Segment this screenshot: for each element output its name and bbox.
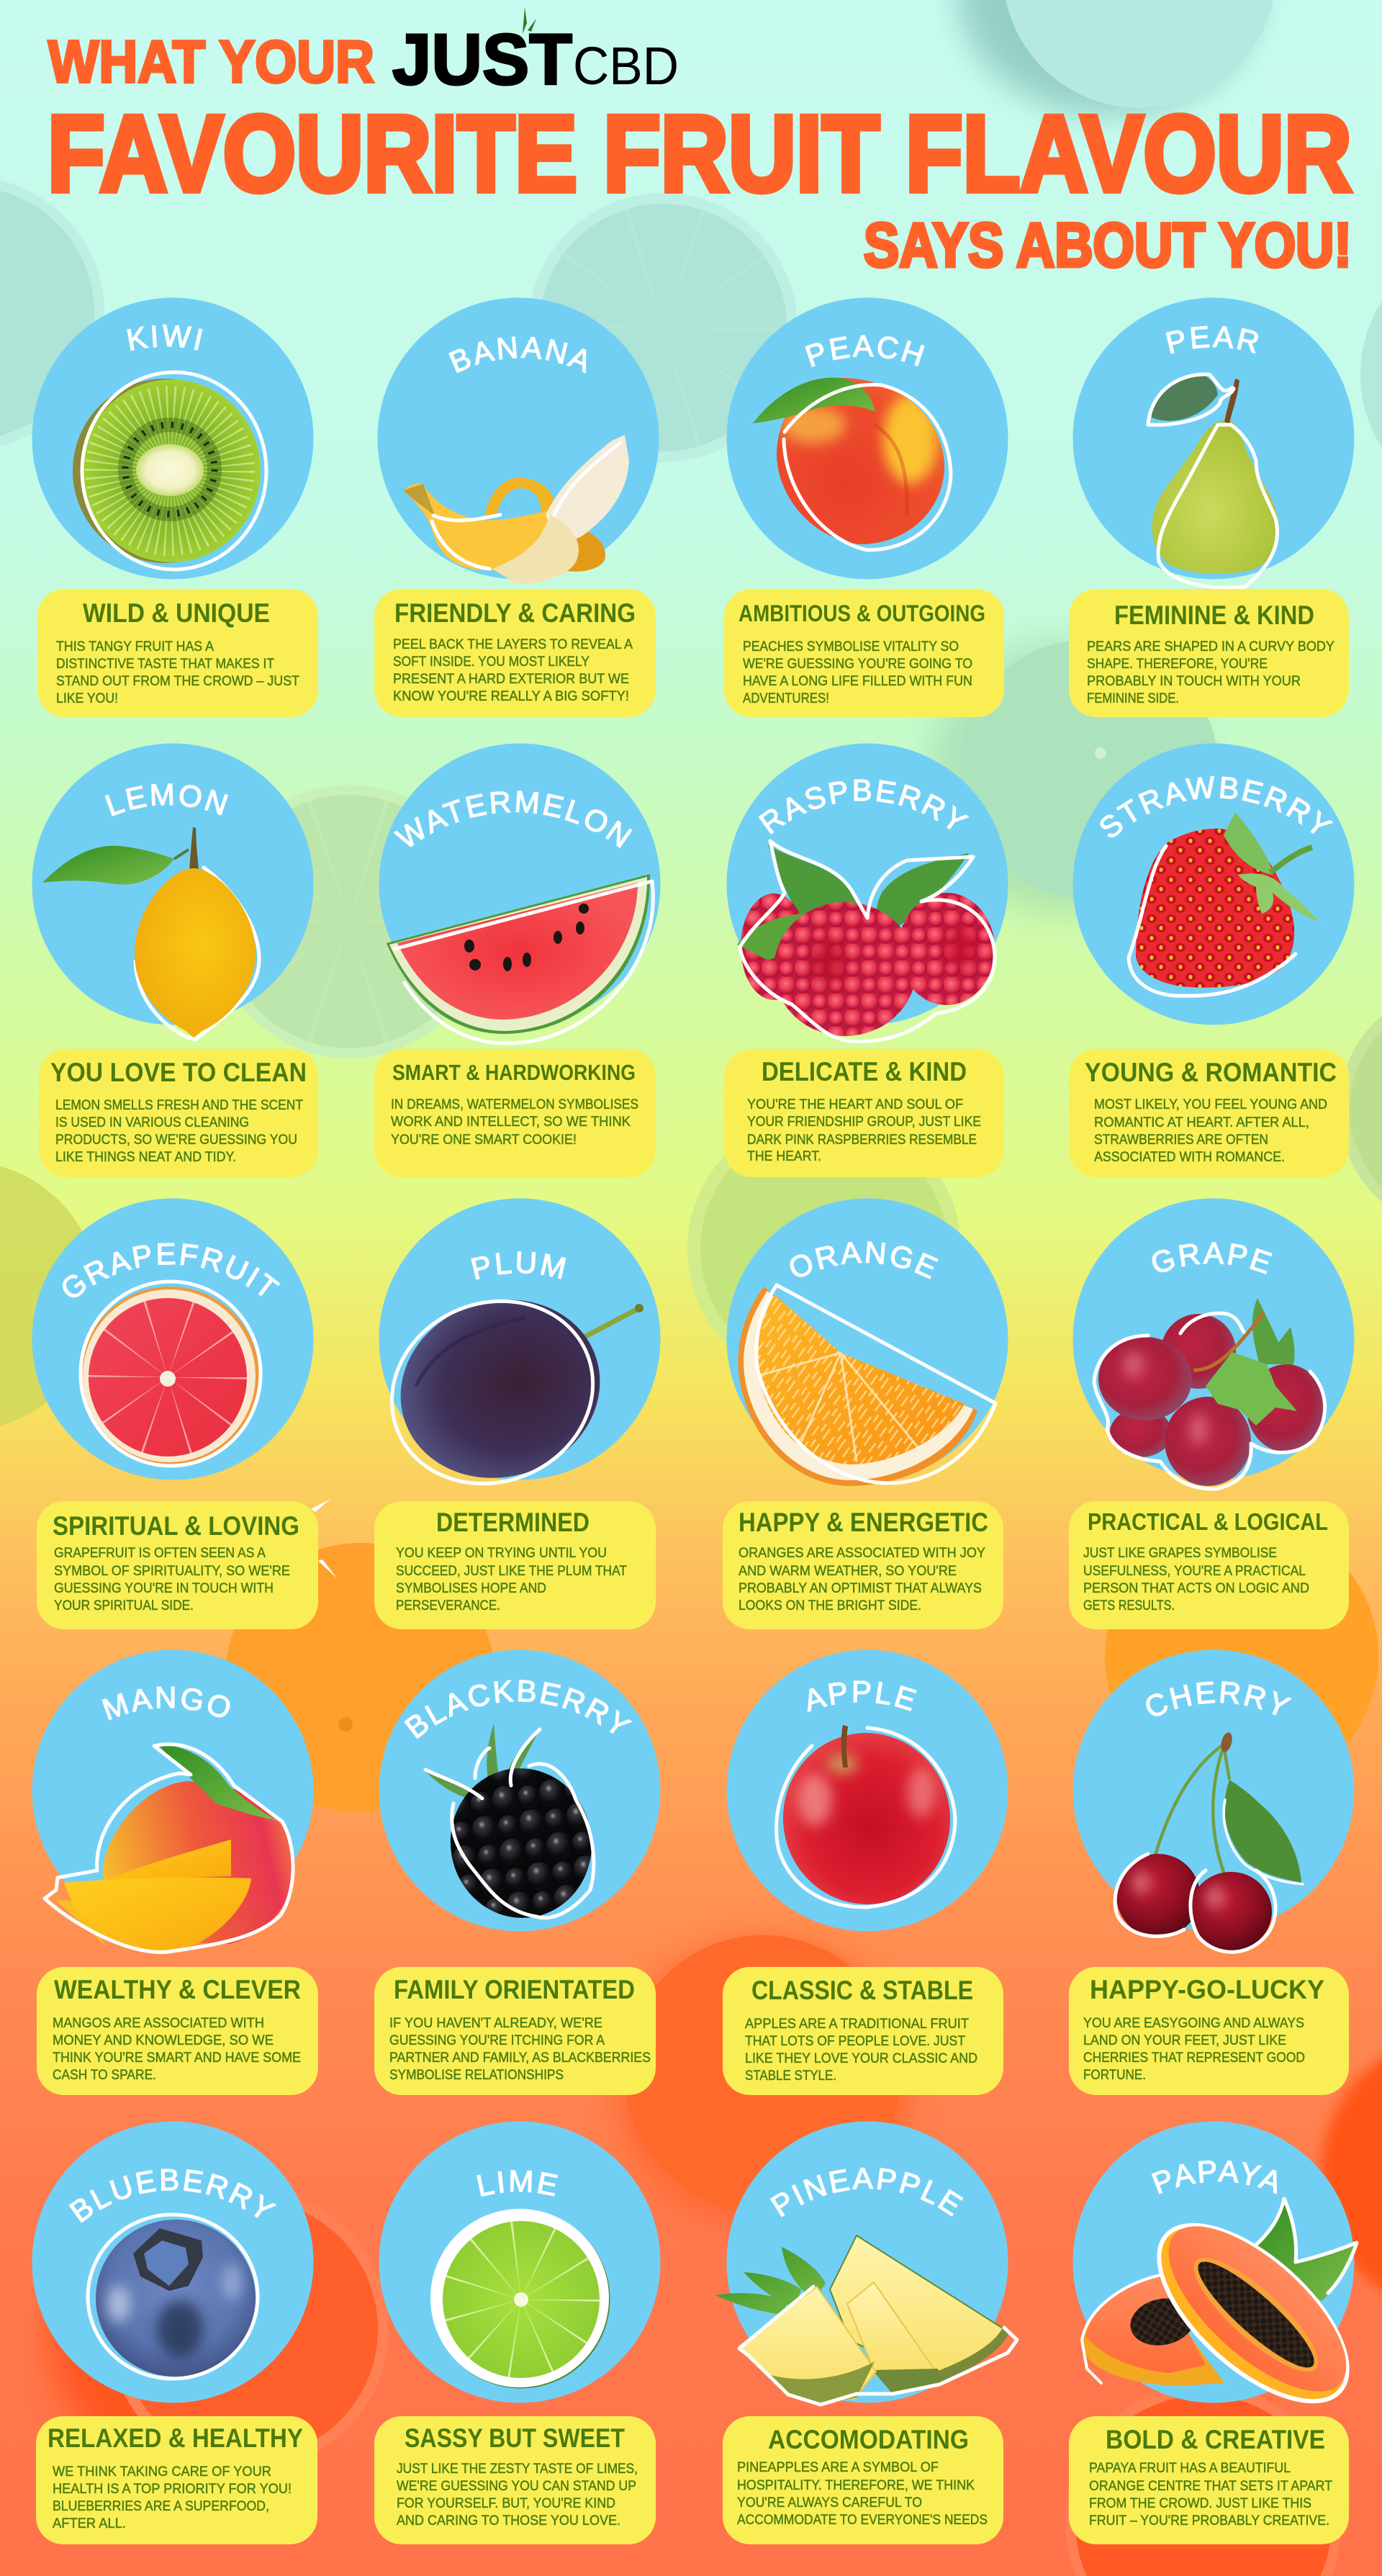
body text: PAPAYA FRUIT HAS A BEAUTIFUL — [1089, 2460, 1291, 2476]
body text: FOR YOURSELF. BUT, YOU'RE KIND — [397, 2495, 615, 2511]
body text: SUCCEED, JUST LIKE THE PLUM THAT — [396, 1563, 627, 1579]
blue circle — [377, 298, 659, 579]
faded lime left row three — [0, 1161, 99, 1431]
body text: FORTUNE. — [1083, 2067, 1146, 2083]
body text: LEMON SMELLS FRESH AND THE SCENT — [55, 1097, 303, 1113]
heading: RELAXED & HEALTHY — [48, 2423, 303, 2453]
curved label: GRAPE — [1152, 1242, 1273, 1274]
body text: AFTER ALL. — [53, 2516, 126, 2531]
curved label: PLUM — [471, 1251, 566, 1280]
heading: DETERMINED — [436, 1508, 590, 1537]
body text: IN DREAMS, WATERMELON SYMBOLISES — [391, 1096, 638, 1112]
card — [374, 1049, 656, 1177]
panel: watermelon — [374, 743, 661, 1177]
heading: HAPPY-GO-LUCKY — [1090, 1975, 1324, 2004]
body text: YOUR FRIENDSHIP GROUP, JUST LIKE — [747, 1114, 981, 1130]
blue circle — [379, 743, 661, 1025]
blue circle — [727, 1650, 1008, 1931]
body text — [53, 2015, 301, 2083]
card — [374, 589, 656, 717]
icon: apple — [772, 1722, 961, 1915]
body text: LAND ON YOUR FEET, JUST LIKE — [1083, 2032, 1286, 2048]
card — [723, 1967, 1003, 2095]
card — [1069, 1049, 1349, 1177]
blue circle — [1072, 1198, 1355, 1480]
body text: SYMBOLISE RELATIONSHIPS — [389, 2067, 564, 2083]
body text: PRESENT A HARD EXTERIOR BUT WE — [393, 671, 629, 687]
panel: grape — [1068, 1198, 1356, 1629]
heading: ACCOMODATING — [768, 2425, 969, 2454]
decorative spikes and card — [37, 1499, 337, 1629]
heading: AMBITIOUS & OUTGOING — [739, 600, 985, 626]
body text: FRUIT – YOU'RE PROBABLY CREATIVE. — [1089, 2513, 1329, 2528]
blue circle — [727, 743, 1008, 1025]
faded orange slice bottom left — [50, 2189, 389, 2469]
panel: lime — [374, 2121, 662, 2544]
body text: JUST LIKE THE ZESTY TASTE OF LIMES, — [397, 2461, 638, 2477]
panel: cherry — [1069, 1650, 1362, 2095]
curved label: LEMON — [105, 783, 229, 816]
body text: PROBABLY AN OPTIMIST THAT ALWAYS — [739, 1580, 982, 1596]
card — [37, 589, 318, 717]
panel: orange — [720, 1198, 1008, 1629]
curved label: PINEAPPLE — [770, 2167, 963, 2217]
body text: THIS TANGY FRUIT HAS A — [56, 639, 214, 654]
faded orange slice bottom right — [1065, 2385, 1342, 2576]
body text: MANGOS ARE ASSOCIATED WITH — [53, 2015, 264, 2031]
body text: MONEY AND KNOWLEDGE, SO WE — [53, 2032, 274, 2048]
body text — [396, 1545, 627, 1613]
body text — [53, 2464, 292, 2531]
heading: SASSY BUT SWEET — [405, 2423, 625, 2453]
body text: ASSOCIATED WITH ROMANCE. — [1094, 1149, 1285, 1165]
body text — [743, 639, 972, 706]
panel: kiwi — [32, 298, 318, 717]
card — [723, 1501, 1003, 1629]
body text — [747, 1096, 981, 1164]
curved label: BLACKBERRY — [404, 1680, 633, 1739]
body text — [1083, 2015, 1305, 2083]
icon: cherries — [1115, 1731, 1303, 1952]
card — [374, 1501, 656, 1629]
curved label: APPLE — [808, 1680, 917, 1712]
body text: GRAPEFRUIT IS OFTEN SEEN AS A — [54, 1545, 266, 1561]
blue circle — [1072, 2121, 1355, 2403]
card — [723, 2416, 1003, 2544]
icon: strawberry — [1129, 812, 1319, 996]
heading: FEMININE & KIND — [1114, 600, 1314, 630]
body text: PARTNER AND FAMILY, AS BLACKBERRIES — [389, 2050, 651, 2066]
card — [39, 1049, 318, 1177]
card — [1069, 1967, 1349, 2095]
heading: DELICATE & KIND — [762, 1057, 967, 1086]
body text: APPLES ARE A TRADITIONAL FRUIT — [745, 2016, 969, 2032]
curved label: KIWI — [127, 324, 203, 351]
body text: HAVE A LONG LIFE FILLED WITH FUN — [743, 673, 972, 689]
heading: FAMILY ORIENTATED — [394, 1975, 635, 2004]
body text: YOUR SPIRITUAL SIDE. — [54, 1598, 194, 1613]
body text — [1087, 639, 1334, 706]
curved label: PAPAYA — [1152, 2160, 1277, 2194]
logo: JustCBD — [392, 7, 679, 100]
body text: USEFULNESS, YOU'RE A PRACTICAL — [1083, 1563, 1306, 1579]
blue circle — [32, 2121, 314, 2403]
body text: PEEL BACK THE LAYERS TO REVEAL A — [393, 636, 633, 652]
logo: JustCBD: CBD — [573, 36, 679, 96]
heading: CLASSIC & STABLE — [751, 1976, 973, 2005]
body text — [393, 636, 633, 704]
blue circle — [1072, 298, 1355, 579]
icon: papaya — [1081, 2194, 1376, 2432]
panel: grapefruit — [22, 1198, 337, 1629]
body text — [389, 2015, 651, 2083]
body text: PROBABLY IN TOUCH WITH YOUR — [1087, 673, 1301, 689]
body text: IF YOU HAVEN'T ALREADY, WE'RE — [389, 2015, 602, 2031]
body text: SOFT INSIDE. YOU MOST LIKELY — [393, 654, 590, 670]
heading: WILD & UNIQUE — [83, 598, 270, 628]
curved label: WATERMELON — [393, 791, 632, 848]
body text — [1089, 2460, 1332, 2528]
panel: blueberry — [29, 2121, 317, 2544]
body text: PRODUCTS, SO WE'RE GUESSING YOU — [55, 1132, 297, 1148]
icon: pear — [1148, 374, 1279, 587]
body text: DISTINCTIVE TASTE THAT MAKES IT — [56, 656, 274, 672]
faded lime slice centre right row three — [687, 1112, 961, 1386]
body text: DARK PINK RASPBERRIES RESEMBLE — [747, 1132, 977, 1148]
body text: BLUEBERRIES ARE A SUPERFOOD, — [53, 2498, 269, 2514]
body text: ORANGE CENTRE THAT SETS IT APART — [1089, 2478, 1332, 2494]
heading: BOLD & CREATIVE — [1106, 2425, 1325, 2454]
icon: orange wedge — [738, 1285, 995, 1486]
body text: GUESSING YOU'RE ITCHING FOR A — [389, 2032, 605, 2048]
body text — [745, 2016, 977, 2084]
body text: PERSEVERANCE. — [396, 1598, 500, 1613]
body text — [56, 639, 299, 706]
icon: pineapple slices — [715, 2235, 1017, 2405]
curved label: MANGO — [101, 1686, 230, 1721]
icon: lime slice — [430, 2209, 610, 2389]
body text: ORANGES ARE ASSOCIATED WITH JOY — [739, 1545, 985, 1561]
body text: YOU ARE EASYGOING AND ALWAYS — [1083, 2015, 1304, 2031]
body text: FEMININE SIDE. — [1087, 690, 1179, 706]
body text: JUST LIKE GRAPES SYMBOLISE — [1083, 1545, 1277, 1561]
body text: SHAPE. THEREFORE, YOU'RE — [1087, 656, 1268, 672]
icon: blackberry — [425, 1724, 602, 1927]
body text: ROMANTIC AT HEART. AFTER ALL, — [1094, 1114, 1309, 1130]
body text: LIKE THEY LOVE YOUR CLASSIC AND — [745, 2050, 977, 2066]
faded fruit top right — [957, 0, 1276, 115]
body text: CASH TO SPARE. — [53, 2067, 156, 2083]
icon: blueberry — [88, 2215, 258, 2379]
panel: plum — [364, 1198, 664, 1629]
faded lime right edge — [1360, 238, 1382, 511]
title — [48, 7, 1352, 280]
icon: lemon — [42, 827, 259, 1040]
curved label: ORANGE — [790, 1241, 939, 1279]
icon: kiwi slice — [73, 372, 266, 569]
card — [37, 1967, 318, 2095]
card — [724, 589, 1004, 717]
panel: banana — [374, 298, 659, 717]
panel: pineapple — [715, 2121, 1017, 2544]
body text: THE HEART. — [747, 1148, 821, 1164]
faded lime slice row two — [212, 785, 486, 1058]
body text — [739, 1545, 985, 1613]
body text — [737, 2459, 988, 2528]
heading: YOUNG & ROMANTIC — [1085, 1058, 1337, 1087]
heading: WEALTHY & CLEVER — [54, 1975, 301, 2004]
faded lime right edge row three — [1339, 986, 1382, 1231]
body text: STAND OUT FROM THE CROWD – JUST — [56, 673, 299, 689]
icon: grapefruit slice — [81, 1282, 261, 1466]
curved label: LIME — [477, 2170, 559, 2197]
body text: HEALTH IS A TOP PRIORITY FOR YOU! — [53, 2481, 292, 2497]
icon: raspberries — [737, 841, 995, 1041]
card — [1069, 1501, 1349, 1629]
blue circle — [32, 1650, 314, 1931]
icon: banana — [403, 435, 629, 584]
card — [36, 2416, 317, 2544]
faded dark orange fruit — [615, 1935, 911, 2225]
body text: MOST LIKELY, YOU FEEL YOUNG AND — [1094, 1096, 1327, 1112]
faded orange right — [1105, 1519, 1378, 1793]
body text: STRAWBERRIES ARE OFTEN — [1094, 1132, 1268, 1148]
faded lime slice left — [0, 176, 104, 450]
heading line: what your: WHAT YOUR — [48, 28, 374, 95]
faded pale fruit mid right — [929, 639, 1219, 914]
body text: SYMBOLISES HOPE AND — [396, 1580, 546, 1596]
icon: plum — [364, 1271, 643, 1513]
card — [374, 1967, 656, 2095]
body text: ACCOMMODATE TO EVERYONE'S NEEDS — [737, 2512, 988, 2528]
panel: apple — [717, 1650, 1008, 2095]
faded lime slice top centre — [528, 193, 798, 462]
heading: PRACTICAL & LOGICAL — [1088, 1508, 1328, 1535]
body text: AND CARING TO THOSE YOU LOVE. — [397, 2513, 620, 2528]
card — [374, 2416, 656, 2544]
body text: SYMBOL OF SPIRITUALITY, SO WE'RE — [54, 1563, 290, 1579]
heading: SMART & HARDWORKING — [392, 1060, 636, 1085]
panel: lemon — [32, 743, 318, 1177]
body text — [1094, 1096, 1327, 1165]
body text: YOU'RE THE HEART AND SOUL OF — [747, 1096, 963, 1112]
blue circle — [1072, 743, 1355, 1025]
icon: peach — [753, 377, 951, 550]
body text: LIKE THINGS NEAT AND TIDY. — [55, 1149, 236, 1165]
body text — [1083, 1545, 1309, 1613]
body text: THINK YOU'RE SMART AND HAVE SOME — [53, 2050, 301, 2066]
curved label: GRAPEFRUIT — [62, 1243, 281, 1297]
blue circle — [32, 298, 314, 579]
blue circle — [1072, 1650, 1355, 1931]
body text: YOU'RE ALWAYS CAREFUL TO — [737, 2495, 922, 2510]
body text — [397, 2461, 638, 2528]
card — [1069, 589, 1349, 717]
card — [724, 1049, 1004, 1177]
blue circle — [379, 2121, 661, 2403]
body text: KNOW YOU'RE REALLY A BIG SOFTY! — [393, 688, 629, 704]
body text: PERSON THAT ACTS ON LOGIC AND — [1083, 1580, 1309, 1596]
panel: mango — [24, 1650, 318, 2095]
logo: JustCBD: JUST — [392, 19, 572, 100]
heading: FRIENDLY & CARING — [394, 598, 636, 628]
heading: HAPPY & ENERGETIC — [739, 1508, 988, 1537]
faded orange centre — [225, 1543, 494, 1812]
curved label: PEACH — [805, 335, 925, 367]
panel: raspberry — [724, 743, 1008, 1177]
curved label: PEAR — [1166, 325, 1258, 354]
curved label: RASPBERRY — [759, 779, 970, 835]
panel: papaya — [1069, 2121, 1376, 2544]
body text: GETS RESULTS. — [1083, 1598, 1175, 1613]
body text: HOSPITALITY. THEREFORE, WE THINK — [737, 2477, 975, 2493]
blue circle — [32, 743, 314, 1025]
body text: THAT LOTS OF PEOPLE LOVE. JUST — [745, 2033, 965, 2049]
faded orange right lower — [1321, 2034, 1382, 2315]
body text: STABLE STYLE. — [745, 2068, 836, 2084]
body text: LOOKS ON THE BRIGHT SIDE. — [739, 1598, 921, 1613]
body text: PINEAPPLES ARE A SYMBOL OF — [737, 2459, 939, 2475]
body text: WE'RE GUESSING YOU CAN STAND UP — [397, 2478, 636, 2494]
body text — [55, 1097, 303, 1165]
body text: WE'RE GUESSING YOU'RE GOING TO — [743, 656, 972, 672]
icon: mango — [45, 1743, 295, 1953]
blue circle — [379, 1650, 661, 1931]
body text — [391, 1096, 638, 1148]
curved label: CHERRY — [1146, 1681, 1292, 1716]
body text: YOU KEEP ON TRYING UNTIL YOU — [396, 1545, 607, 1561]
body text: GUESSING YOU'RE IN TOUCH WITH — [54, 1580, 274, 1596]
panel: strawberry — [1069, 743, 1355, 1177]
heading: YOU LOVE TO CLEAN — [50, 1058, 307, 1087]
blue circle — [727, 1198, 1008, 1480]
body text — [54, 1545, 290, 1613]
body text: PEACHES SYMBOLISE VITALITY SO — [743, 639, 959, 654]
body text: AND WARM WEATHER, SO YOU'RE — [739, 1563, 957, 1579]
body text: FROM THE CROWD. JUST LIKE THIS — [1089, 2495, 1311, 2511]
body text: PEARS ARE SHAPED IN A CURVY BODY — [1087, 639, 1334, 654]
panel: pear — [1069, 298, 1355, 717]
blue circle — [727, 2121, 1008, 2403]
blue circle — [727, 298, 1008, 579]
body text: YOU'RE ONE SMART COOKIE! — [391, 1132, 577, 1148]
icon: watermelon slice — [387, 874, 653, 1043]
body text: WORK AND INTELLECT, SO WE THINK — [391, 1114, 631, 1130]
body text: WE THINK TAKING CARE OF YOUR — [53, 2464, 271, 2480]
body text: CHERRIES THAT REPRESENT GOOD — [1083, 2050, 1305, 2066]
card — [1069, 2416, 1349, 2544]
blue circle — [32, 1198, 314, 1480]
panel: blackberry — [363, 1650, 673, 2095]
curved label: BANANA — [448, 336, 586, 374]
body text: IS USED IN VARIOUS CLEANING — [55, 1114, 249, 1130]
icon: grapes — [1094, 1298, 1326, 1489]
curved label: STRAWBERRY — [1100, 776, 1334, 838]
blue circle — [379, 1198, 661, 1480]
panel: peach — [724, 298, 1008, 717]
body text: ADVENTURES! — [743, 690, 829, 706]
body text: LIKE YOU! — [56, 690, 118, 706]
heading: SPIRITUAL & LOVING — [53, 1511, 299, 1541]
curved label: BLUEBERRY — [69, 2169, 276, 2223]
